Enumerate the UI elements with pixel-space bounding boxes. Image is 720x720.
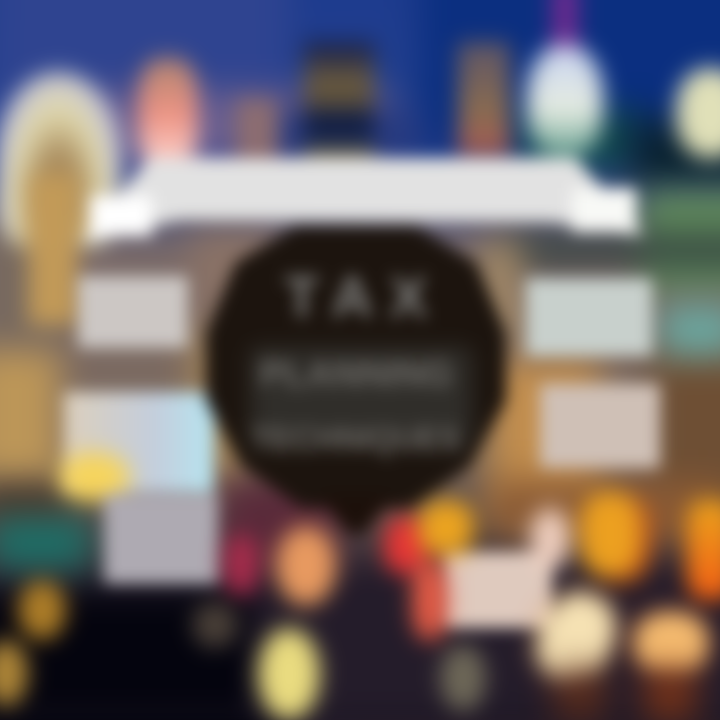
banner right tip [572,188,636,232]
panel: text left 2 [64,392,214,492]
lights: street bokeh [0,478,720,720]
title text: TAX [284,265,444,330]
panel: text bottom right [444,552,552,628]
subtitle text [250,353,465,462]
panel: text right 2 [540,384,660,468]
icon: tan tower left [28,175,78,325]
panel: text left 3 [104,494,218,584]
banner left tip [90,196,152,236]
icon: pale tower [236,98,278,198]
icon: dark tower centre [304,42,374,177]
badge background [206,226,506,508]
heading banner [80,158,645,243]
badge bottom tip [326,498,386,540]
subtitle text: TECHNIQUES [251,421,461,457]
icon: spire [552,0,578,60]
badge: title circle [194,215,518,540]
icon: pink tower [138,58,198,173]
badge text backdrop [250,347,472,442]
subtitle text: PLANNING [259,353,453,394]
icon: pale bulb far right [676,68,720,158]
panel: text right 1 [526,278,652,356]
icon: white bulb tower [527,45,603,160]
icon: brown tower right [458,42,510,157]
icon: yellow glow left [58,452,130,502]
panel: text left 1 [78,276,188,348]
icon: domed building left [0,72,121,247]
